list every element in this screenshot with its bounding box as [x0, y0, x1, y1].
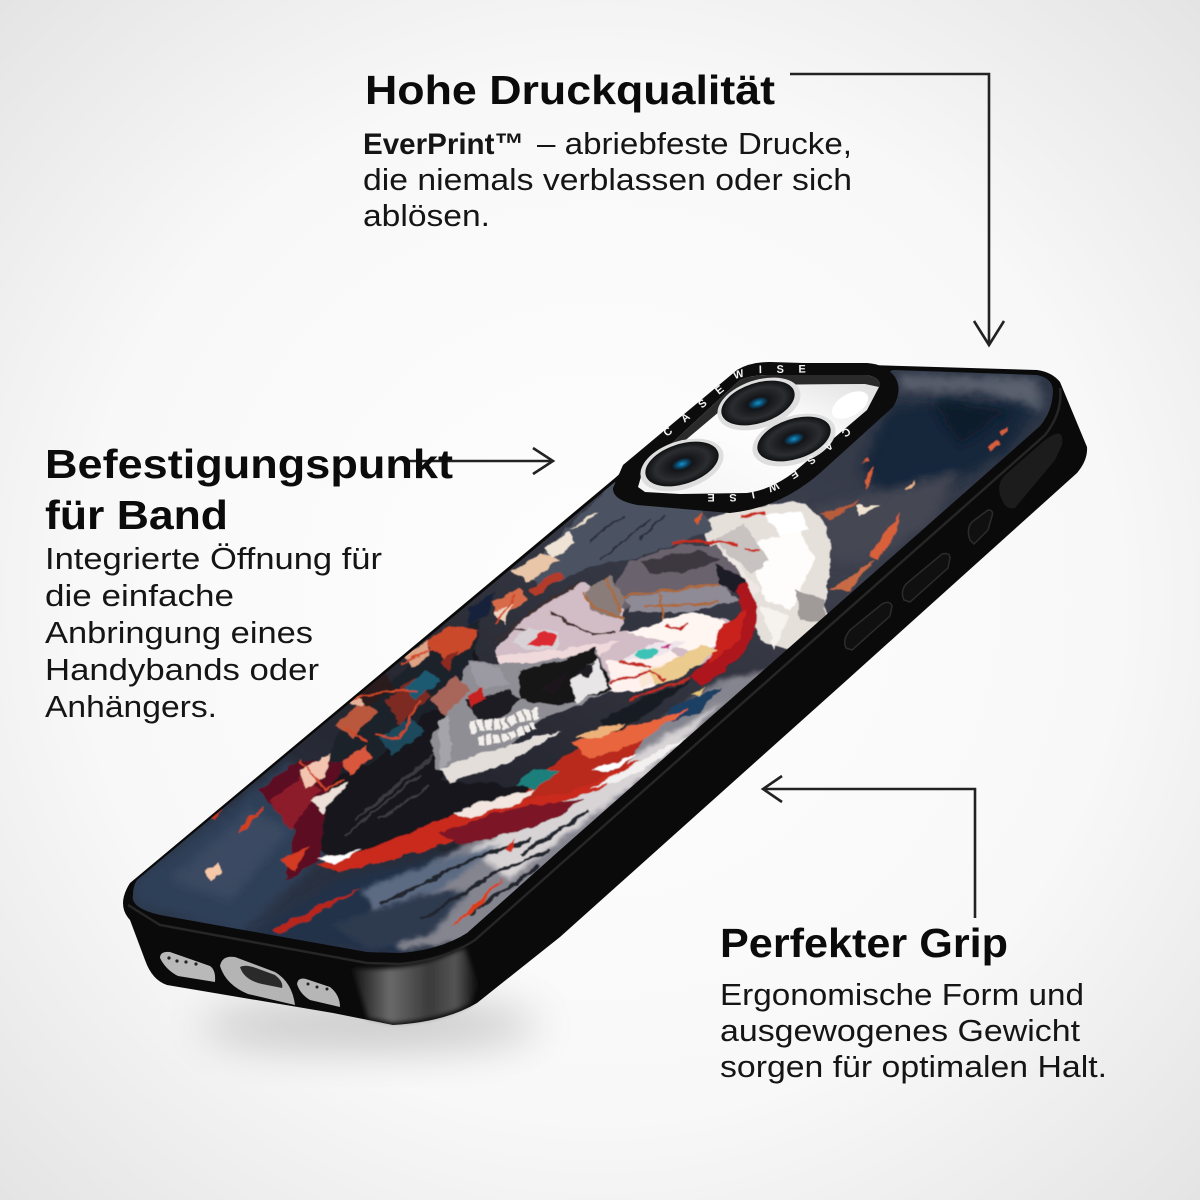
red edge of hood — [672, 513, 765, 551]
teeth — [470, 712, 540, 741]
corner highlight — [352, 948, 478, 1023]
text block: print quality: ablösen. — [363, 198, 490, 233]
text block: grip: Ergonomische Form und — [720, 977, 1084, 1012]
arrow: strap attachment — [406, 448, 553, 474]
printed artwork — [132, 370, 1053, 953]
red hair line — [690, 580, 757, 688]
small embers top-right — [820, 426, 1008, 618]
phone case with artwork — [123, 362, 1088, 1026]
text block: strap attachment: Anbringung eines — [45, 615, 313, 650]
lens 1 — [711, 368, 807, 440]
text block: grip: ausgewogenes Gewicht — [720, 1013, 1080, 1048]
text block: print quality — [363, 126, 852, 233]
heading: print quality: Hohe Druckqualität — [365, 67, 775, 113]
text block: strap attachment: die einfache — [45, 578, 234, 613]
text block: print quality: die niemals verblassen oder sich — [363, 162, 852, 197]
hair patch — [585, 575, 625, 618]
arrow: print quality — [790, 74, 1004, 345]
heading: strap attachment: Befestigungspunkt — [45, 441, 453, 487]
shawl — [534, 482, 713, 586]
brand text on ring: CASEWISE — [664, 365, 806, 436]
brow and hair strands — [495, 582, 615, 642]
ember outlines — [300, 595, 515, 790]
rim bevel — [128, 388, 1060, 964]
heading: strap attachment: für Band — [45, 492, 228, 538]
lower left flecks — [205, 862, 222, 882]
flash — [827, 385, 873, 425]
grey lower band — [370, 670, 770, 950]
text block: strap attachment — [45, 541, 382, 724]
heading: grip: Perfekter Grip — [720, 920, 1008, 966]
face — [495, 582, 750, 692]
lens 2 — [746, 404, 842, 476]
ring — [613, 363, 899, 513]
text block: print quality: EverPrint™ — [363, 128, 524, 161]
white hood — [700, 503, 831, 650]
mid-right shards — [600, 680, 690, 735]
skull — [430, 650, 612, 775]
lens 3 — [634, 429, 730, 501]
dark mass behind skull — [320, 650, 530, 856]
text block: strap attachment: Anhängers. — [45, 689, 217, 724]
text block: print quality: – abriebfeste Drucke, — [537, 126, 852, 161]
dark parallel strokes lower band — [380, 810, 590, 920]
side buttons — [845, 434, 1062, 650]
white shards in streak — [318, 848, 362, 865]
phone drop shadow — [200, 1001, 540, 1049]
jaw highlight — [440, 730, 562, 782]
text block: grip: sorgen für optimalen Halt. — [720, 1049, 1107, 1084]
text block: strap attachment: Handybands oder — [45, 652, 319, 687]
lower-left navy — [134, 760, 327, 930]
eyes — [512, 628, 560, 650]
sunlit patches — [628, 611, 726, 652]
arrow: grip — [763, 776, 975, 918]
text block: strap attachment: Integrierte Öffnung für — [45, 541, 382, 576]
camera ring with lenses — [612, 363, 898, 513]
dark hair strands — [345, 750, 440, 835]
clouds top right — [857, 396, 1040, 493]
red streaks — [317, 760, 640, 872]
ember clusters along upper-left edge — [300, 532, 575, 812]
camera ring with lenses: CASEWISE — [708, 428, 850, 502]
bottom ports — [160, 952, 340, 1007]
case body — [123, 362, 1087, 1025]
heading: strap attachment — [45, 441, 453, 538]
text block: grip — [720, 977, 1107, 1084]
hood shadow — [614, 543, 742, 610]
crimson — [258, 760, 345, 880]
